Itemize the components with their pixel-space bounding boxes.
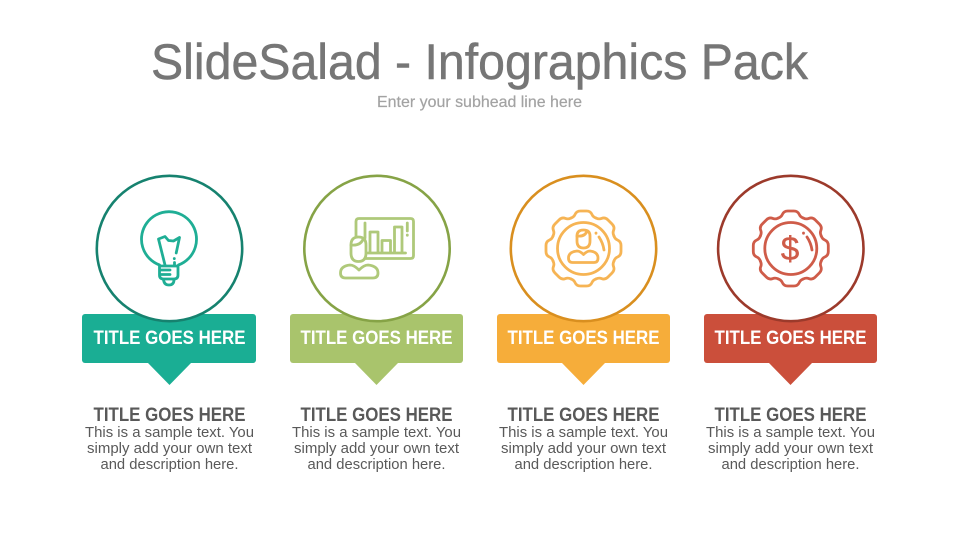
subhead: Enter your subhead line here: [377, 94, 582, 111]
icon: light bulb: [142, 212, 197, 285]
text block: teal: simply add your own text: [87, 441, 252, 457]
text block: red: TITLE GOES HERE: [714, 404, 866, 426]
text block: orange: This is a sample text. You: [499, 425, 668, 441]
title: SlideSalad - Infographics Pack: [151, 34, 809, 90]
icon: presenter with chart: [340, 218, 414, 278]
ring: red: [718, 176, 864, 321]
text block: green: and description here.: [308, 457, 446, 473]
text block: red: This is a sample text. You: [706, 425, 875, 441]
banner: red: [704, 314, 877, 385]
text block: red: and description here.: [722, 457, 860, 473]
text block: red: [706, 404, 875, 473]
text block: teal: and description here.: [100, 457, 238, 473]
text block: red: simply add your own text: [708, 441, 873, 457]
banner: orange: [497, 314, 670, 385]
text block: green: This is a sample text. You: [292, 425, 461, 441]
text block: orange: TITLE GOES HERE: [508, 404, 660, 426]
banner: teal: [82, 314, 256, 385]
text block: green: TITLE GOES HERE: [300, 404, 452, 426]
ring: orange: [511, 176, 656, 321]
text block: teal: TITLE GOES HERE: [94, 404, 246, 426]
text block: orange: simply add your own text: [501, 441, 666, 457]
banner: teal: TITLE GOES HERE: [94, 327, 246, 349]
panel: green chart column: [290, 176, 463, 473]
text block: green: simply add your own text: [294, 441, 459, 457]
ring: green: [304, 176, 450, 321]
banner: red: TITLE GOES HERE: [714, 327, 866, 349]
text block: teal: This is a sample text. You: [85, 425, 254, 441]
icon: gear with dollar sign: [753, 211, 828, 286]
text block: orange: and description here.: [514, 457, 652, 473]
banner: orange: TITLE GOES HERE: [508, 327, 660, 349]
ring: teal: [97, 176, 242, 321]
panel: orange people column: [497, 176, 670, 473]
text block: orange: [499, 404, 668, 473]
banner: green: [290, 314, 463, 385]
icon: gear with person: [546, 211, 621, 286]
icon: dollar sign: $: [781, 230, 799, 267]
banner: green: TITLE GOES HERE: [300, 327, 452, 349]
panel: teal idea column: [82, 176, 256, 473]
panel: red money column: [704, 176, 877, 473]
text block: green: [292, 404, 461, 473]
text block: teal: [85, 404, 254, 473]
